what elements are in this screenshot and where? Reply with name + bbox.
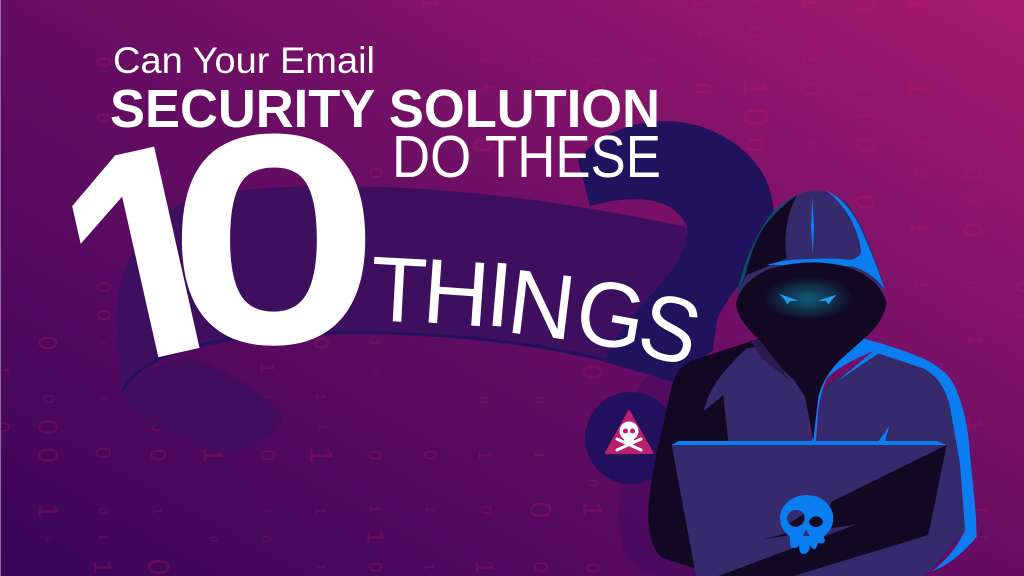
binary digit pattern: 0 (804, 168, 816, 174)
binary digit pattern: 1 (367, 505, 383, 513)
binary digit pattern: 0 (93, 113, 113, 123)
icon: blue skull (780, 495, 833, 554)
binary digit pattern: 1 (316, 424, 326, 430)
binary digit pattern: 1 (422, 563, 438, 571)
binary digit pattern: 0 (694, 83, 716, 95)
binary digit pattern: 0 (742, 25, 768, 39)
big number 10 (72, 134, 366, 358)
binary digit pattern: 1 (912, 281, 928, 290)
binary digit pattern: 0 (583, 563, 603, 573)
title line: can your email: Can Your Email (113, 40, 375, 81)
binary digit pattern: 0 (580, 79, 610, 95)
binary digit pattern: 1 (736, 79, 774, 97)
big number 10: 1 (26, 58, 281, 486)
binary digit pattern: 0 (142, 559, 174, 575)
binary digit pattern: 1 (968, 113, 978, 118)
laptop (672, 441, 947, 576)
hacker: face shadow (736, 262, 887, 440)
binary digit pattern: 1 (475, 450, 495, 460)
binary digit pattern: 0 (802, 141, 818, 149)
binary digit pattern: 1 (150, 507, 166, 515)
binary digit pattern: 1 (98, 396, 108, 402)
binary digit pattern: 1 (367, 339, 383, 347)
binary digit pattern: 0 (736, 108, 774, 126)
binary digit pattern: 0 (468, 138, 498, 152)
binary digit pattern: 1 (95, 169, 111, 177)
binary digit pattern: 1 (198, 447, 228, 463)
binary digit pattern: 0 (420, 450, 440, 460)
warning badge (585, 392, 677, 484)
title line: do these: DO THESE (392, 124, 661, 190)
binary digit pattern: 0 (33, 336, 63, 350)
binary digit pattern: 0 (370, 368, 380, 374)
binary digit pattern: 1 (96, 534, 110, 541)
binary digit pattern: 0 (32, 447, 64, 463)
binary digit pattern: 1 (479, 56, 495, 64)
binary digit pattern: 1 (972, 533, 988, 542)
hacker: hood collar shadow (750, 340, 792, 382)
binary digit pattern: 0 (476, 506, 494, 515)
binary digit pattern: 0 (910, 168, 930, 178)
binary digit pattern: 0 (912, 113, 928, 121)
binary digit pattern: 1 (965, 55, 981, 63)
binary digit pattern: 0 (912, 56, 928, 64)
title line: security solution: SECURITY SOLUTION (110, 79, 660, 139)
binary digit pattern: 0 (365, 562, 385, 572)
binary digit pattern: 1 (962, 419, 988, 431)
icon: skull and crossbones (617, 422, 641, 450)
curved word things: T (368, 238, 429, 343)
curved word things: H (420, 240, 493, 347)
binary digit pattern: 1 (584, 251, 600, 259)
binary digit pattern: 1 (262, 394, 272, 400)
hacker: blue shoulder highlight (812, 338, 977, 572)
binary digit pattern: 0 (690, 224, 714, 236)
big question mark hook (578, 121, 774, 382)
binary digit pattern: 1 (88, 560, 118, 574)
binary digit pattern: 1 (470, 560, 500, 574)
binary digit pattern: 1 (964, 334, 986, 346)
binary digit pattern: 0 (963, 84, 983, 94)
binary digit pattern: 0 (90, 447, 116, 459)
binary digit pattern: 1 (905, 221, 935, 235)
curved word things: I (482, 243, 517, 347)
binary digit pattern: 0 (532, 396, 548, 404)
binary digit pattern: 1 (902, 79, 938, 97)
curved word things (368, 238, 711, 386)
binary digit pattern: 0 (850, 195, 880, 209)
binary digit pattern: 0 (150, 364, 166, 372)
left edge line (0, 0, 1, 576)
binary digit pattern: 0 (958, 223, 988, 237)
hacker: left torso (648, 338, 793, 568)
binary digit pattern: 1 (313, 393, 329, 401)
binary digit pattern: 1 (962, 194, 984, 206)
hacker: eye glow (763, 277, 853, 320)
binary digit pattern: 1 (423, 507, 437, 514)
title (72, 46, 698, 362)
binary digit pattern: 1 (630, 248, 666, 266)
binary digit pattern: 1 (532, 451, 548, 459)
binary digit pattern: 0 (365, 450, 385, 460)
binary digit pattern: 1 (578, 502, 608, 518)
binary digit pattern: 0 (92, 309, 114, 321)
curved word things: G (568, 259, 653, 372)
big number 10: 0 (177, 82, 370, 395)
binary digit pattern: 0 (477, 396, 493, 404)
binary digit pattern: 0 (965, 281, 981, 289)
binary digit pattern: 1 (912, 26, 928, 34)
binary digit pattern: 0 (92, 56, 114, 68)
binary digit pattern: 0 (740, 138, 770, 152)
binary digit pattern: 0 (850, 137, 880, 153)
binary digit pattern: 0 (795, 82, 825, 96)
binary digit pattern: 1 (303, 446, 339, 464)
binary digit pattern: 1 (529, 56, 545, 64)
binary digit pattern: 1 (850, 81, 880, 95)
binary digit pattern: 0 (256, 449, 278, 461)
binary digit pattern: 0 (32, 419, 64, 435)
binary digit pattern: 0 (259, 535, 275, 543)
binary digit pattern: 1 (747, 55, 763, 63)
question mark ribbon (117, 186, 687, 457)
binary digit pattern: 0 (586, 227, 600, 234)
binary digit pattern: 1 (590, 57, 600, 63)
binary digit pattern: 1 (314, 564, 328, 571)
binary digit pattern: 0 (148, 422, 168, 432)
curved word things: S (629, 271, 711, 386)
binary digit pattern: 1 (850, 107, 880, 123)
binary digit pattern: 1 (313, 507, 329, 515)
binary digit pattern: 0 (42, 536, 54, 542)
binary digit pattern: 1 (262, 508, 272, 514)
binary digit pattern: 0 (802, 28, 818, 36)
binary digit pattern: 0 (308, 337, 334, 349)
binary digit pattern: 0 (262, 424, 272, 430)
hacker: eyes (779, 294, 837, 304)
binary digit pattern: 1 (969, 504, 991, 516)
binary digit pattern: 0 (580, 421, 606, 433)
binary digit pattern: 1 (694, 25, 720, 39)
binary digit pattern: 0 (529, 561, 551, 573)
binary digit pattern: 0 (146, 449, 170, 461)
binary digit pattern: 1 (798, 53, 822, 65)
binary digit pattern: 0 (690, 196, 714, 208)
binary digit pattern: 1 (640, 223, 656, 231)
binary digit pattern: 0 (364, 167, 386, 179)
binary digit pattern: 1 (98, 341, 108, 346)
hacker: hood (737, 190, 885, 293)
binary digit pattern: 0 (689, 82, 711, 94)
hooded hacker (648, 190, 977, 576)
binary digit pattern: 1 (257, 363, 277, 373)
binary digit pattern: 0 (524, 502, 556, 518)
binary digit pattern: 1 (480, 82, 500, 92)
binary digit pattern: 0 (585, 479, 601, 487)
binary digit pattern: 1 (32, 503, 64, 519)
binary digit pattern: 0 (858, 56, 872, 64)
curved word things: N (503, 251, 581, 360)
question mark shadow stem (619, 370, 700, 576)
binary digit pattern: 0 (958, 166, 988, 180)
binary digit pattern: 0 (96, 508, 110, 515)
binary digit pattern: 1 (362, 530, 388, 544)
binary digit pattern: 0 (40, 395, 56, 404)
binary digit pattern: 1 (909, 137, 931, 149)
hacker: right torso panel (817, 353, 965, 576)
binary digit pattern: 0 (208, 536, 218, 542)
binary digit pattern: 0 (578, 364, 608, 380)
hacker: left torso panel (703, 347, 812, 442)
binary digit pattern: 1 (642, 56, 658, 64)
binary digit pattern: 0 (92, 281, 114, 293)
